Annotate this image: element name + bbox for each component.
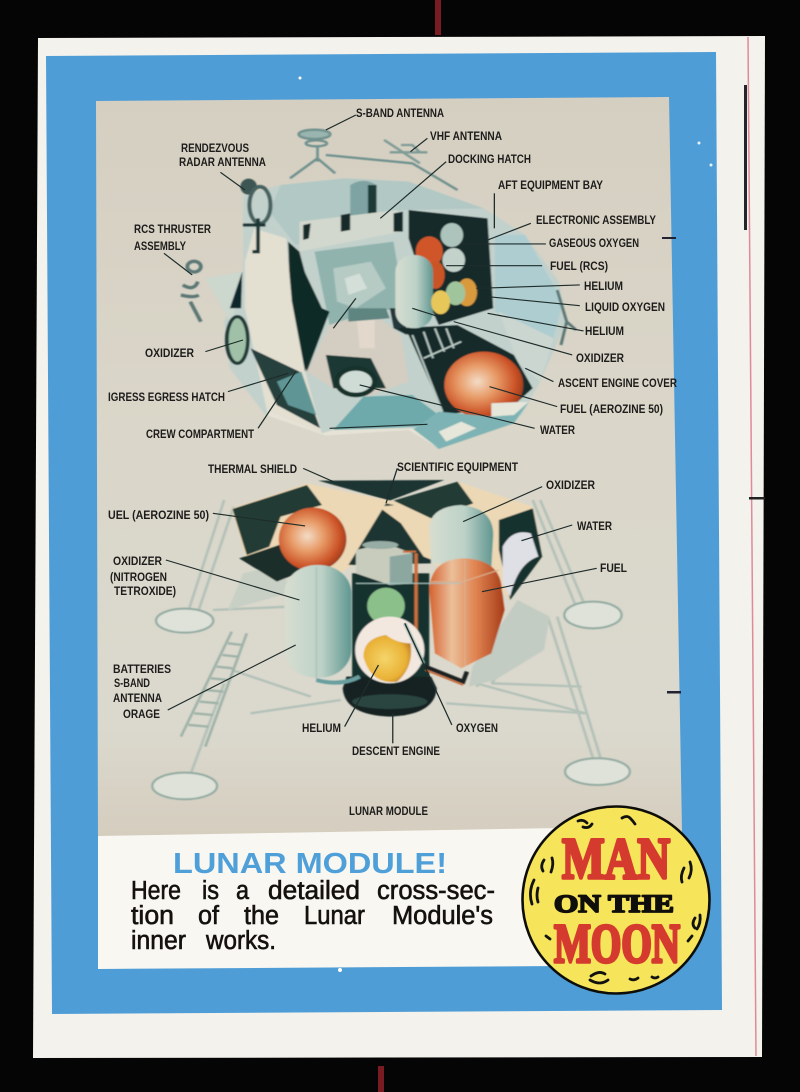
callout labels: descent stage: ORAGE [123,707,160,721]
caption body text: cross-sec- [377,877,495,905]
caption body text: Lunar [304,902,365,930]
caption body text: the [244,902,279,930]
callout labels: ascent stage: CREW COMPARTMENT [146,427,255,441]
s-band antenna dish and mast [290,130,457,190]
vhf antenna [384,140,427,163]
callout labels: ascent stage: RENDEZVOUS [181,141,249,155]
callout labels: ascent stage: RCS THRUSTER [134,222,211,236]
moon disc [522,806,710,994]
callout labels: descent stage: BATTERIES [113,662,171,676]
caption body text: of [198,902,220,930]
pink trim line on right of card [748,37,756,1056]
callout labels: ascent stage: LIQUID OXYGEN [585,300,665,314]
rcs thrusters [181,261,243,325]
callout labels: ascent stage: ASCENT ENGINE COVER [558,376,677,390]
callout labels: descent stage: LUNAR MODULE [349,804,428,818]
callout labels: descent stage: FUEL [600,561,627,575]
caption body text: inner [131,927,186,955]
print artifacts and edge marks [298,0,765,1092]
caption body text: a [236,877,250,905]
ON THE lettering: ON THE [554,891,674,918]
callout leader lines: ascent stage [164,115,584,428]
callout labels: descent stage: OXIDIZER [546,478,595,492]
cross-section illustration: descent stage [152,480,630,799]
label: thermal shield: THERMAL SHIELD [208,462,297,476]
caption body text: tion [131,902,174,930]
caption body text: works. [205,927,276,955]
caption heading: LUNAR MODULE! [173,848,447,880]
caption body text: is [202,877,219,905]
callout labels: descent stage: DESCENT ENGINE [352,744,440,758]
MAN lettering: MAN [562,826,670,891]
landing legs and struts [187,500,604,780]
caption body text: detailed [268,877,360,905]
caption panel [98,828,560,969]
callout labels: ascent stage: HELIUM [585,324,624,338]
MOON lettering: MOON [554,913,680,974]
callout labels: descent stage: S-BAND [114,676,150,690]
badge: man on the moon [522,806,710,994]
callout labels: descent stage: SCIENTIFIC EQUIPMENT [397,460,519,474]
callout labels: ascent stage: OXIDIZER [576,351,624,365]
callout labels: ascent stage: ELECTRONIC ASSEMBLY [536,213,656,227]
callout labels: descent stage: OXYGEN [456,721,498,735]
callout labels: ascent stage: ASSEMBLY [134,239,186,253]
callout labels: ascent stage: FUEL (AEROZINE 50) [560,402,663,416]
footpads [152,602,630,799]
callout labels: ascent stage: OXIDIZER [145,346,194,360]
callout labels: descent stage: TETROXIDE) [114,584,176,598]
callout labels: descent stage: HELIUM [302,721,341,735]
label: s-band antenna: S-BAND ANTENNA [356,106,444,120]
caption body text: Here [131,877,181,905]
craters [530,816,700,983]
caption body text: Module's [392,902,493,930]
ladder [181,632,247,747]
callout labels: ascent stage: IGRESS EGRESS HATCH [108,390,225,404]
callout labels: ascent stage: FUEL (RCS) [550,259,608,273]
callout labels: descent stage: WATER [577,519,612,533]
callout labels: ascent stage: WATER [540,423,575,437]
callout labels: ascent stage: DOCKING HATCH [448,152,531,166]
blue panel [46,52,722,1014]
caption body text [131,877,495,955]
callout labels: ascent stage: VHF ANTENNA [430,129,502,143]
callout labels: ascent stage: HELIUM [584,279,623,293]
callout labels: descent stage: (NITROGEN [110,570,167,584]
callout labels: ascent stage: RADAR ANTENNA [179,155,266,169]
cross-section illustration: ascent stage [181,130,576,449]
callout labels: descent stage: UEL (AEROZINE 50) [108,508,209,522]
callout labels: ascent stage [108,106,677,441]
radar antenna [240,179,270,252]
callout labels: descent stage: ANTENNA [113,691,162,705]
callout labels: ascent stage: AFT EQUIPMENT BAY [498,178,603,192]
callout labels: ascent stage: GASEOUS OXYGEN [549,236,639,250]
callout labels: descent stage [108,460,627,818]
callout labels: descent stage: OXIDIZER [113,554,162,568]
callout leader lines: descent stage [166,468,597,743]
illustration panel background [96,97,682,838]
